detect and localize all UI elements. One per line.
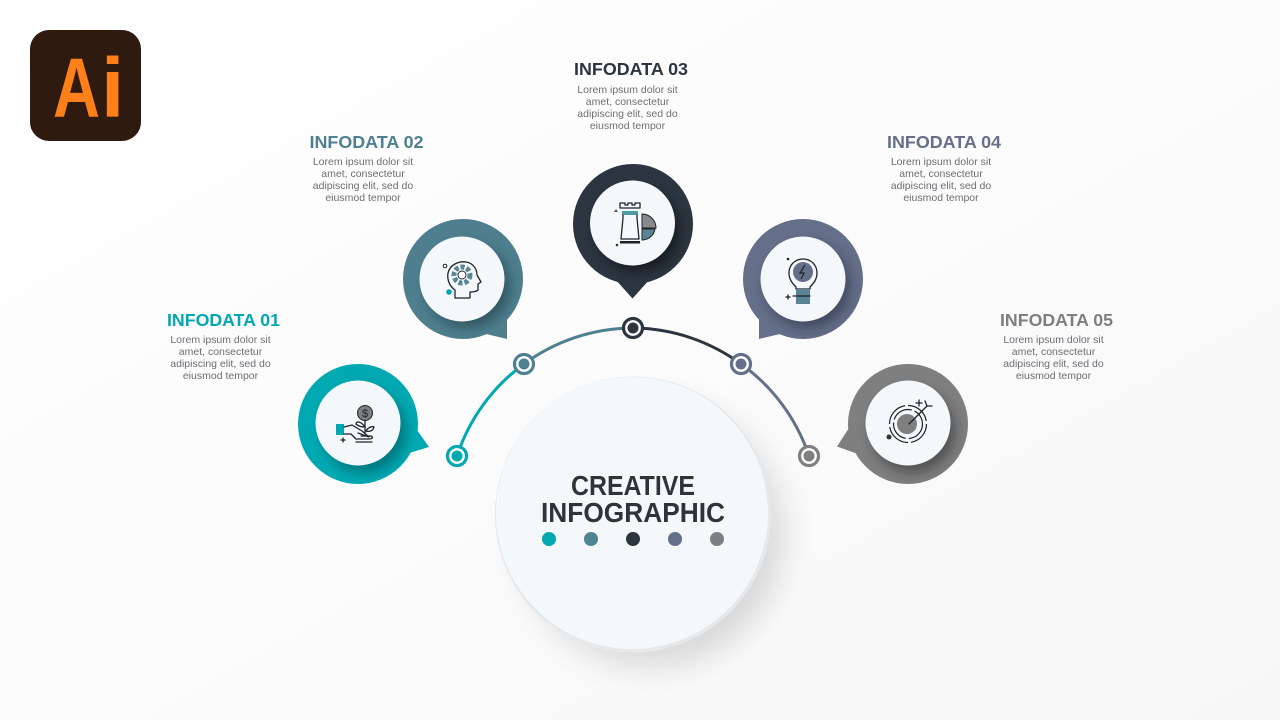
panel: infodata 04 text: INFODATA 04 (887, 132, 1001, 152)
icon: target with arrow (886, 400, 932, 442)
panel: infodata 04 text: adipiscing elit, sed do (891, 180, 991, 192)
pin 3 (573, 164, 693, 298)
panel: infodata 05 text: INFODATA 05 (1000, 310, 1113, 330)
panel: infodata 03 text: eiusmod tempor (590, 120, 666, 132)
icon: head with gear (443, 262, 481, 298)
panel: infodata 03 text (574, 59, 688, 132)
colour dots (542, 532, 724, 546)
panel: infodata 01 text: eiusmod tempor (183, 370, 259, 382)
central title: CREATIVE (571, 470, 695, 501)
timeline node 2 (514, 354, 534, 374)
panel: infodata 04 text: Lorem ipsum dolor sit (891, 156, 991, 168)
panel: infodata 04 text: amet, consectetur (899, 168, 983, 180)
icon: Adobe Illustrator logo: i (101, 41, 124, 135)
timeline node 3 (624, 318, 642, 338)
pin 5 (837, 364, 968, 484)
panel: infodata 03 text: adipiscing elit, sed do (577, 108, 678, 120)
icon: light bulb (786, 258, 817, 304)
timeline arc (457, 328, 809, 456)
panel: infodata 05 text: amet, consectetur (1012, 346, 1096, 358)
central title: INFOGRAPHIC (541, 497, 725, 528)
panel: infodata 05 text: adipiscing elit, sed do (1003, 358, 1104, 370)
timeline node 1 (448, 446, 466, 466)
panel: infodata 03 text: amet, consectetur (586, 96, 670, 108)
panel: infodata 04 text (887, 132, 1001, 204)
icon: chess rook and pie chart (614, 203, 656, 246)
panel: infodata 04 text: eiusmod tempor (903, 192, 979, 204)
pin 1 (298, 364, 429, 484)
timeline node 4 (732, 354, 750, 374)
panel: infodata 01 text (167, 310, 280, 382)
panel: infodata 05 text (1000, 310, 1113, 382)
panel: infodata 02 text: Lorem ipsum dolor sit (313, 156, 413, 168)
timeline node 5 (800, 446, 818, 466)
icon: Adobe Illustrator logo: A (53, 41, 100, 135)
panel: infodata 01 text: Lorem ipsum dolor sit (170, 334, 271, 346)
panel: infodata 01 text: amet, consectetur (179, 346, 263, 358)
panel: infodata 02 text: adipiscing elit, sed do (313, 180, 413, 192)
panel: infodata 03 text: INFODATA 03 (574, 59, 688, 79)
panel: infodata 01 text: INFODATA 01 (167, 310, 280, 330)
icon: hand with money plant: $ (362, 408, 368, 420)
central circle (495, 376, 784, 667)
panel: infodata 01 text: adipiscing elit, sed do (170, 358, 271, 370)
icon: Adobe Illustrator logo (30, 30, 141, 141)
panel: infodata 02 text: INFODATA 02 (310, 132, 424, 152)
panel: infodata 03 text: Lorem ipsum dolor sit (577, 84, 678, 96)
panel: infodata 05 text: eiusmod tempor (1016, 370, 1092, 382)
pin 2 (403, 219, 523, 339)
panel: infodata 02 text: amet, consectetur (321, 168, 405, 180)
panel: infodata 02 text: eiusmod tempor (325, 192, 401, 204)
pin 4 (743, 219, 863, 339)
panel: infodata 02 text (310, 132, 424, 204)
panel: infodata 05 text: Lorem ipsum dolor sit (1003, 334, 1104, 346)
